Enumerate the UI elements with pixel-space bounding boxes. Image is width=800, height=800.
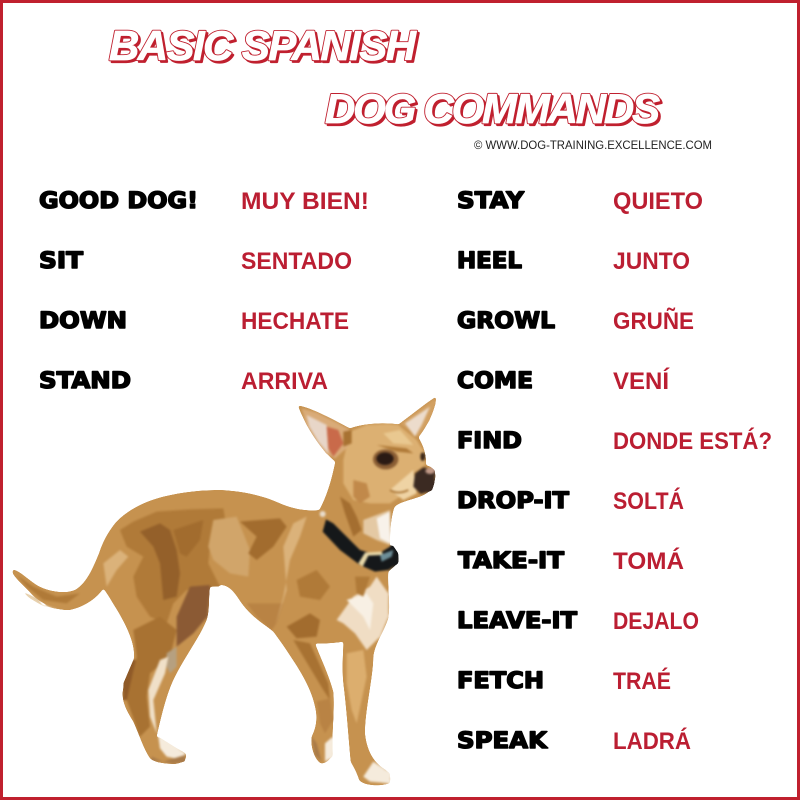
left command list	[39, 188, 369, 395]
left command list: MUY BIEN!	[241, 188, 369, 215]
left command list: DOWN	[39, 308, 127, 334]
right command list: LADRÁ	[613, 727, 691, 755]
white chest	[337, 510, 390, 650]
right command list: VENÍ	[613, 367, 670, 395]
body shading	[17, 508, 330, 647]
head shading	[340, 424, 425, 537]
right command list: QUIETO	[613, 188, 703, 215]
right command list: JUNTO	[613, 248, 690, 275]
right command list: FETCH	[457, 668, 544, 694]
right command list: STAY	[457, 188, 525, 214]
dog body silhouette	[13, 397, 436, 785]
right command list: TAKE-IT	[458, 548, 565, 574]
left command list: GOOD DOG!	[39, 188, 198, 214]
right command list: TRAÉ	[613, 667, 671, 695]
left command list: ARRIVA	[241, 368, 328, 395]
right command list: TOMÁ	[613, 547, 684, 575]
right command list: FIND	[457, 428, 522, 454]
collar	[320, 511, 398, 572]
copyright line: © WWW.DOG-TRAINING.EXCELLENCE.COM	[474, 140, 712, 152]
left command list: SENTADO	[241, 248, 352, 275]
left command list: HECHATE	[241, 308, 349, 335]
right command list: GROWL	[457, 308, 555, 334]
left command list: STAND	[39, 368, 131, 394]
right command list: SOLTÁ	[613, 487, 684, 515]
title: Basic Spanish: BASIC SPANISH	[109, 22, 418, 69]
title: Dog Commands: DOG COMMANDS	[325, 85, 660, 132]
title: Dog Commands: DOG COMMANDS	[327, 87, 662, 134]
right command list: DONDE ESTÁ?	[613, 427, 772, 455]
title: Basic Spanish: BASIC SPANISH	[111, 24, 420, 71]
ears	[302, 398, 436, 458]
right command list: SPEAK	[457, 728, 549, 754]
right command list: COME	[457, 368, 533, 394]
title: Basic Spanish: BASIC SPANISH	[109, 22, 418, 69]
right command list: HEEL	[457, 248, 522, 274]
title: Dog Commands: DOG COMMANDS	[325, 85, 660, 132]
left command list: SIT	[39, 248, 84, 274]
right command list: LEAVE-IT	[457, 608, 578, 634]
right command list: DROP-IT	[457, 488, 570, 514]
eye and muzzle	[373, 449, 435, 500]
illustration: chihuahua dog	[13, 397, 436, 785]
leg shading	[123, 617, 367, 737]
right command list: DEJALO	[613, 608, 699, 635]
right command list: GRUÑE	[613, 307, 694, 335]
white paws	[152, 737, 390, 783]
right command list	[457, 188, 772, 755]
